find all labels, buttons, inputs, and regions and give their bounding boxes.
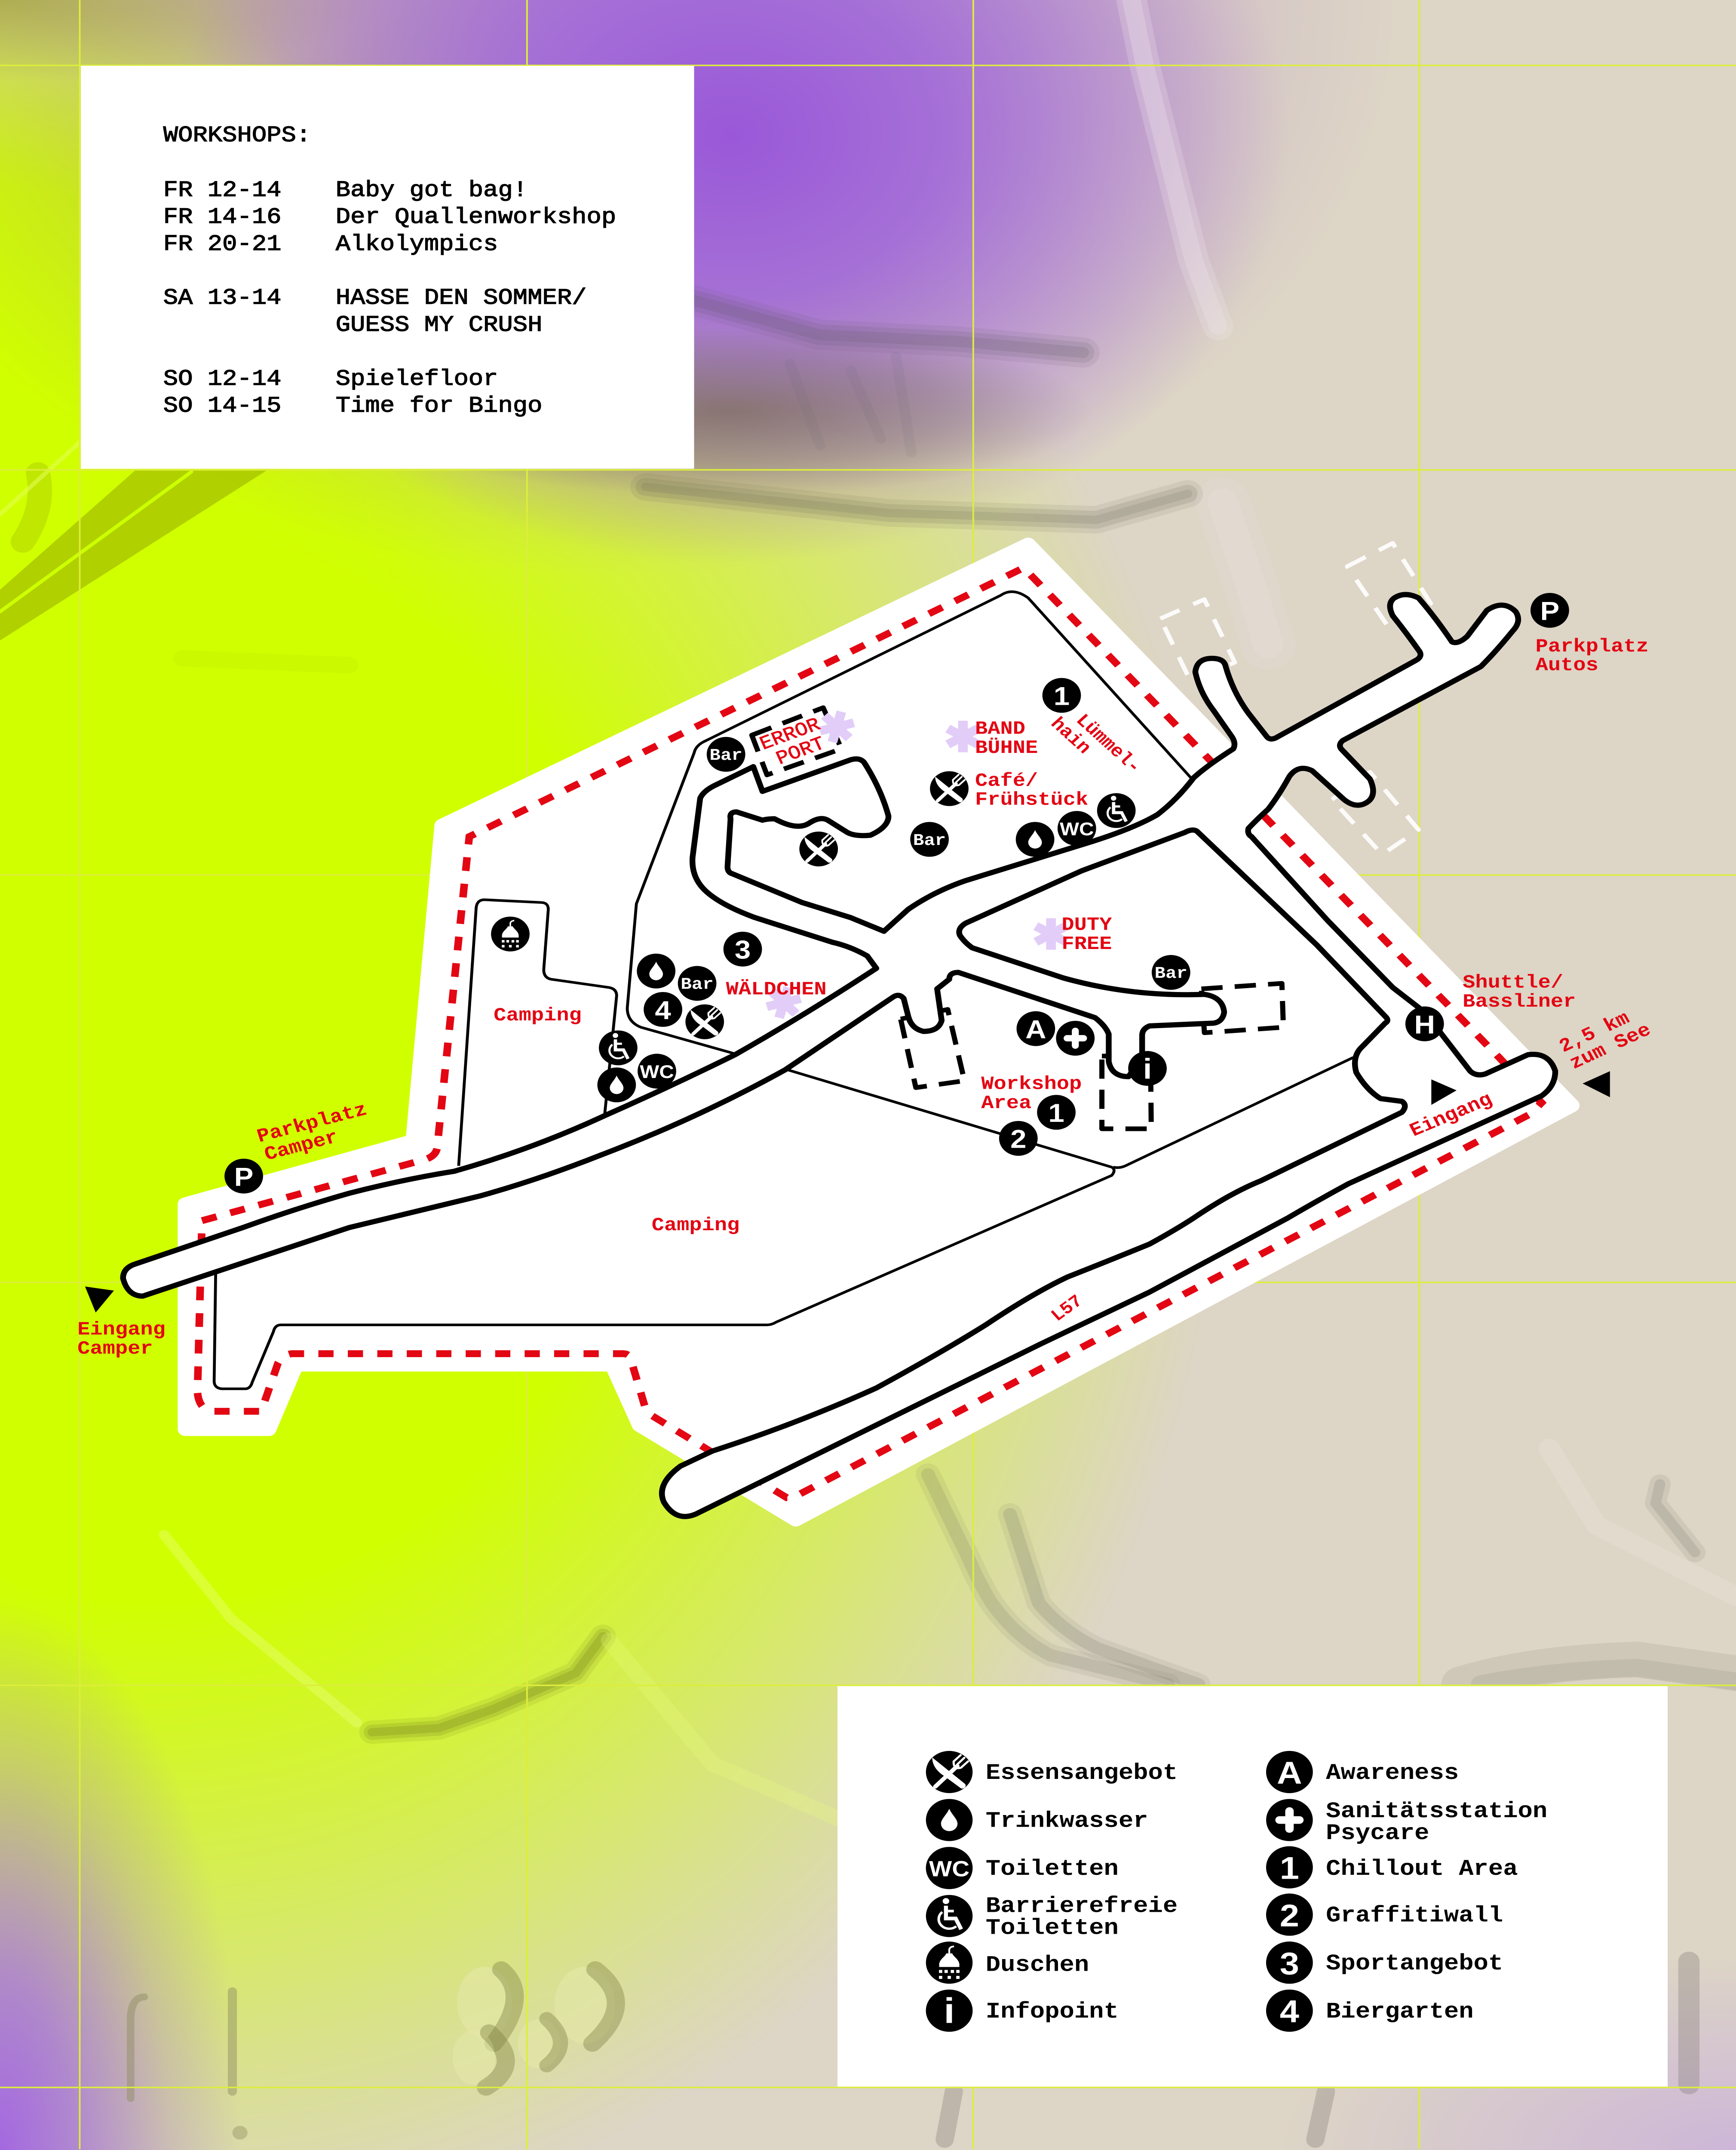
label: error port: PORT <box>773 733 828 770</box>
icon: graffiti 2 <box>999 1121 1038 1156</box>
legend item: medical: Psycare <box>1326 1821 1429 1846</box>
legend item: infopoint: i <box>944 1991 955 2031</box>
schedule sunday <box>163 367 543 419</box>
icon: graffiti 2: 2 <box>1010 1124 1026 1154</box>
schedule friday: Alkolympics <box>336 232 498 257</box>
legend item: awareness <box>1266 1751 1459 1793</box>
legend item: food <box>926 1751 1178 1793</box>
braille blobs <box>131 1967 616 2140</box>
label: parkplatz autos: Autos <box>1536 654 1598 676</box>
legend item: accessible toilets: Barrierefreie <box>986 1894 1178 1919</box>
arrow: entrance camper <box>85 1287 114 1312</box>
icon: food cafe <box>930 771 969 806</box>
icon: chillout 1 north <box>1043 678 1081 713</box>
label: duty free: FREE <box>1061 933 1112 955</box>
icon: bar center: Bar <box>913 832 946 850</box>
dark ridge band lower <box>645 487 1188 520</box>
schedule sunday: SO 12-14 <box>163 367 282 392</box>
legend item: toilets <box>926 1847 1119 1889</box>
dark curve lower left <box>372 1636 603 1732</box>
area: camping west <box>459 900 616 1166</box>
festival site area <box>185 544 1572 1520</box>
label: camping west: Camping <box>494 1004 582 1026</box>
label: error port: ERROR <box>757 714 824 755</box>
label: shuttle: Bassliner <box>1463 991 1576 1012</box>
icon: wc north <box>1058 811 1096 846</box>
faint relief on lime <box>182 658 350 665</box>
label: see: 2,5 km <box>1555 1007 1633 1057</box>
label: eingang camper: Eingang <box>77 1319 166 1340</box>
icon: medical <box>1056 1021 1095 1056</box>
icon: info <box>1128 1051 1167 1086</box>
legend item: medical: Sanitätsstation <box>1326 1800 1547 1824</box>
legend item: sport: Sportangebot <box>1326 1952 1503 1976</box>
legend item: infopoint <box>926 1990 1119 2032</box>
icon: info: i <box>1143 1053 1152 1085</box>
label: lummelhain: Lümmel- <box>1071 711 1145 778</box>
legend item: infopoint: Infopoint <box>986 2000 1119 2024</box>
icon: chillout 1 workshop: 1 <box>1048 1098 1064 1127</box>
label: lummelhain: hain <box>1046 714 1095 759</box>
arrow: entrance <box>1431 1079 1457 1105</box>
label: waldchen: WÄLDCHEN <box>726 978 827 1000</box>
icon: shuttle stop: H <box>1414 1010 1435 1039</box>
icon: water north <box>1016 822 1054 857</box>
legend item: beer garden: Biergarten <box>1326 2000 1474 2024</box>
legend item: accessible toilets: Toiletten <box>986 1916 1119 1941</box>
icon: beer garden 4 <box>644 992 682 1027</box>
legend item: graffiti: Graffitiwall <box>1326 1904 1503 1929</box>
label: camping main: Camping <box>652 1214 739 1236</box>
schedule saturday: SA 13-14 <box>163 286 282 311</box>
light curves lower left <box>164 1535 838 1818</box>
icon: sport 3 <box>724 932 762 967</box>
label: see: zum See <box>1566 1019 1655 1074</box>
legend item: showers: Duschen <box>986 1953 1089 1978</box>
legend item: toilets: WC <box>929 1857 969 1881</box>
icon: awareness: A <box>1025 1015 1046 1044</box>
label: parkplatz camper: Camper <box>262 1126 341 1166</box>
icon: accessible north <box>1097 793 1135 828</box>
icon: water forest <box>637 954 675 989</box>
icon: awareness <box>1017 1011 1055 1046</box>
icon: bar duty free: Bar <box>1155 964 1187 983</box>
icon: chillout 1 workshop <box>1037 1095 1076 1130</box>
label: eingang camper: Camper <box>77 1338 153 1359</box>
icon: bar duty free <box>1152 955 1190 990</box>
legend item: sport <box>1266 1941 1503 1984</box>
fence: red dashed boundary <box>197 568 1542 1498</box>
schedule friday: FR 14-16 <box>163 205 282 230</box>
panel: legend <box>837 1686 1668 2087</box>
icon: shower <box>491 917 530 952</box>
legend item: graffiti: 2 <box>1280 1898 1299 1933</box>
icon: food forest <box>685 1004 724 1039</box>
icon: parking camper: P <box>234 1162 253 1192</box>
legend item: water: Trinkwasser <box>986 1809 1148 1834</box>
icon: bar center <box>910 822 949 857</box>
legend item: sport: 3 <box>1280 1946 1299 1981</box>
legend item: food: Essensangebot <box>986 1761 1178 1786</box>
area: workshop boundary <box>1113 1057 1353 1167</box>
legend item: medical <box>1266 1799 1547 1846</box>
dark double curve center bottom <box>928 1474 1198 1684</box>
area: camping main <box>214 1069 1114 1389</box>
legend item: chillout: Chillout Area <box>1326 1857 1518 1882</box>
diagonal relief top left <box>0 442 269 641</box>
parking spaces outside the site <box>1160 543 1431 854</box>
relief right bottom <box>1461 1448 1736 1684</box>
relief bottom right corner <box>1686 1961 1692 2085</box>
legend item: showers <box>926 1941 1089 1984</box>
icon: shuttle stop <box>1405 1007 1444 1041</box>
legend item: water <box>926 1799 1148 1841</box>
schedule friday: FR 20-21 <box>163 232 282 257</box>
schedule sunday: Spielefloor <box>336 367 498 392</box>
legend item: awareness: Awareness <box>1326 1761 1459 1786</box>
icon: bar forest <box>678 966 716 1001</box>
label: parkplatz camper: Parkplatz <box>255 1099 370 1148</box>
dark ridge band upper <box>694 301 1083 453</box>
thin area boundaries <box>214 592 1353 1389</box>
icon: sport 3: 3 <box>735 935 751 964</box>
legend item: awareness: A <box>1277 1756 1302 1791</box>
schedule friday: Baby got bag! <box>336 178 528 203</box>
icon: parking autos <box>1531 593 1569 628</box>
label: duty free: DUTY <box>1061 914 1112 936</box>
icon: accessible west <box>599 1030 638 1065</box>
black dashed tents <box>752 708 1283 1129</box>
area: main festival grounds <box>627 592 1191 1055</box>
schedule sunday: Time for Bingo <box>336 394 543 419</box>
schedule friday: FR 12-14 <box>163 178 282 203</box>
icon: bar forest: Bar <box>681 975 714 994</box>
icon: wc north: WC <box>1060 819 1094 839</box>
label: cafe: Café/ <box>975 770 1038 792</box>
icon: parking camper <box>224 1159 263 1194</box>
legend item: beer garden: 4 <box>1280 1994 1299 2029</box>
legend item: toilets: Toiletten <box>986 1857 1119 1882</box>
schedule saturday: HASSE DEN SOMMER/ <box>336 286 587 311</box>
arrow: see <box>1583 1071 1610 1097</box>
schedule friday <box>163 178 616 257</box>
schedule saturday <box>163 286 587 338</box>
icon: chillout 1 north: 1 <box>1054 681 1070 711</box>
legend item: chillout <box>1266 1846 1518 1889</box>
icon: water west <box>597 1067 636 1102</box>
label: shuttle: Shuttle/ <box>1463 972 1563 993</box>
label: band buhne: BAND <box>975 718 1025 740</box>
light road stripe <box>1132 0 1268 645</box>
icon: bar error port: Bar <box>710 746 742 765</box>
label: cafe: Frühstück <box>975 789 1088 811</box>
legend item: beer garden <box>1266 1990 1474 2032</box>
label: eingang: Eingang <box>1406 1088 1496 1142</box>
markers: stage asterisks <box>762 708 1069 1022</box>
schedule sunday: SO 14-15 <box>163 394 282 419</box>
label: workshop area: Workshop <box>981 1073 1082 1095</box>
icon: bar error port <box>707 737 745 772</box>
icon: food loop <box>799 832 838 866</box>
icon: beer garden 4: 4 <box>655 995 671 1025</box>
label: workshop area: Area <box>981 1092 1031 1114</box>
legend item: accessible toilets <box>926 1894 1178 1941</box>
schedule saturday: GUESS MY CRUSH <box>336 313 543 338</box>
panel: workshops <box>81 66 694 469</box>
label: l57: L57 <box>1047 1291 1087 1326</box>
icon: wc west <box>638 1054 676 1089</box>
map icons <box>224 593 1569 1194</box>
icon: wc west: WC <box>640 1061 674 1082</box>
rough ground patch <box>365 322 1094 501</box>
icon: parking autos: P <box>1540 596 1559 626</box>
roads network <box>123 595 1555 1517</box>
legend item: chillout: 1 <box>1280 1851 1299 1886</box>
label: parkplatz autos: Parkplatz <box>1536 636 1649 657</box>
heading: workshops: WORKSHOPS: <box>163 123 311 148</box>
map labels <box>77 636 1655 1359</box>
legend item: graffiti <box>1266 1894 1503 1936</box>
schedule friday: Der Quallenworkshop <box>336 205 616 230</box>
label: band buhne: BÜHNE <box>975 737 1038 759</box>
